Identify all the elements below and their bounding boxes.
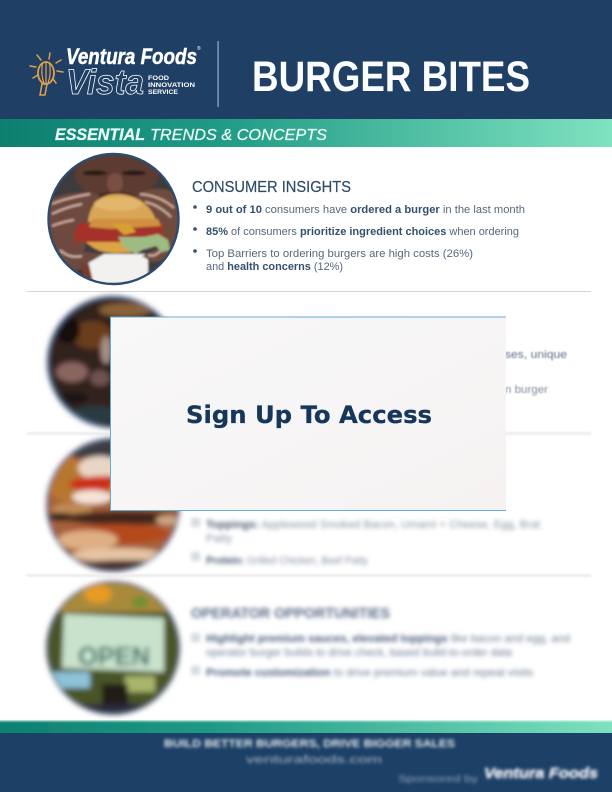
logo: Ventura Foods Vista: Vista: [66, 63, 144, 102]
call to action text: Sign Up To Access: [186, 401, 432, 429]
panel: menu ideas, blurred: [46, 438, 540, 572]
body text, blurred: ses, unique: [505, 349, 567, 361]
bullet list: 9 out of 10 consumers have ordered a burger in the last month: [206, 204, 525, 216]
sponsor line, blurred: Ventura Foods: [484, 765, 598, 782]
photo: burger, blurred: [46, 438, 187, 572]
sponsor line, blurred: Sponsored by: [398, 774, 478, 785]
sponsor line, blurred: [398, 765, 598, 785]
panel: consumer insights: [46, 142, 525, 287]
bullet list, blurred: Protein: Grilled Chicken, Beef Patty: [206, 555, 369, 567]
photo: open sign, blurred: OPEN: [78, 641, 150, 671]
bullet list, blurred: Promote customization to drive premium value and repeat visits: [206, 667, 534, 679]
body text, blurred: n burger: [505, 384, 548, 396]
bullet list, blurred: Patty: [206, 533, 233, 545]
section band: essential trends and concepts: ESSENTIAL: [55, 125, 145, 144]
footer url, blurred: venturafoods.com: [246, 754, 382, 766]
photo: person eating burger: [47, 152, 180, 286]
bullet list: [193, 204, 525, 273]
bullet list, blurred: Highlight premium sauces, elevated toppings like bacon and egg, and: [206, 633, 570, 645]
logo: Ventura Foods Vista: Ventura Foods: [66, 44, 197, 69]
footer: [0, 721, 612, 792]
bullet list: and health concerns (12%): [206, 261, 343, 273]
bullet list, blurred: [191, 518, 540, 567]
section band: essential trends and concepts: [0, 119, 612, 147]
logo: Ventura Foods Vista: [66, 44, 201, 102]
logo: Ventura Foods Vista: INNOVATION: [148, 82, 196, 89]
panel: operator opportunities, blurred: [46, 582, 570, 716]
bullet list: 85% of consumers prioritize ingredient choices when ordering: [206, 226, 519, 238]
heading: consumer insights: CONSUMER INSIGHTS: [192, 179, 351, 196]
photo: restaurant, blurred: [46, 296, 182, 430]
logo: Ventura Foods Vista: FOOD: [148, 75, 170, 82]
header banner: [0, 0, 612, 119]
logo: Ventura Foods Vista: ®: [197, 45, 201, 52]
icon: whisk with rays: [30, 53, 63, 95]
logo: Ventura Foods Vista: SERVICE: [148, 89, 178, 96]
heading, blurred: OPERATOR OPPORTUNITIES: [191, 605, 390, 622]
title: BURGER BITES: [252, 53, 530, 101]
bullet list: Top Barriers to ordering burgers are high costs (26%): [206, 248, 473, 260]
bullet list, blurred: [191, 633, 570, 679]
bullet list, blurred: operator burger builds to drive check, based build-to-order data: [206, 647, 512, 659]
sign up overlay panel: [110, 316, 506, 511]
section band: essential trends and concepts: TRENDS & CONCEPTS: [150, 127, 327, 144]
panel: burger trends, blurred: [46, 296, 567, 430]
footer tagline, blurred: BUILD BETTER BURGERS, DRIVE BIGGER SALES: [164, 738, 455, 750]
photo: open sign, blurred: [46, 582, 182, 716]
bullet list, blurred: Toppings: Applewood Smoked Bacon, Umami + Cheese, Egg, Brat: [206, 519, 540, 531]
body text, blurred: [505, 349, 567, 396]
